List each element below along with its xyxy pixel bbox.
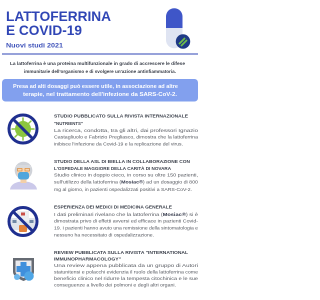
callout [2, 79, 198, 102]
icon: crossed-out virus [9, 115, 37, 143]
title: E COVID-19 [6, 22, 82, 38]
section 1 text [54, 114, 199, 146]
section 1 text: La ricerca, condotta, tra gli altri, dai professori Ignazio [54, 128, 199, 133]
section 4 text: Una review appena pubblicata da un gruppo di Autori [54, 263, 198, 268]
section 3 text [54, 204, 199, 238]
section 1 text: inibisce l'infezione da Covid-19 e la replicazione del virus. [54, 142, 183, 146]
section 4 text: conseguenze a livello dei polmoni e degli altri organi. [54, 282, 176, 288]
section 1 text: STUDIO PUBBLICATO SULLA RIVISTA INTERNAZIONALE [54, 114, 188, 118]
section 3 text: ESPERIENZA DEI MEDICI DI MEDICINA GENERALE [54, 204, 172, 210]
section 2 text: STUDIO DELLA ASL DI BIELLA IN COLLABORAZIONE CON [54, 159, 190, 164]
section 2 text: Studio clinico in doppio cieco, in corso su oltre 150 pazienti, [54, 172, 198, 178]
section 3 text: 19. I pazienti hanno avuto una remissione della sintomatologia e [54, 226, 199, 230]
icon: crossed-out hospital [9, 208, 37, 236]
section 1 text: "NUTRIENTS" [54, 121, 83, 126]
intro paragraph: immunitarie dell'organismo e di svolgere un'azione antinfiammatoria. [24, 69, 176, 74]
section 4 text: REVIEW PUBBLICATA SULLA RIVISTA "INTERNATIONAL [54, 250, 189, 255]
icon: shield with medical cross [13, 258, 34, 281]
section 3 text: nessuno ha necessitato di ospedalizzazione. [54, 232, 154, 238]
intro paragraph [10, 61, 186, 74]
section 2 text: L'OSPEDALE MAGGIORE DELLA CARITÀ DI NOVARA [54, 166, 171, 171]
icon: capsule [166, 8, 190, 49]
section 4 text: IMMUNOPHARMACOLOGY" [54, 256, 121, 262]
title [6, 8, 111, 38]
callout: terapie, nel trattamento dell'infezione da SARS-CoV-2. [23, 92, 178, 98]
intro paragraph: La lattoferrina è una proteina multifunzionale in grado di accrescere le difese [10, 61, 186, 66]
section 4 text: beneficio clinico nel ridurre la tempesta citochinica e le sue [54, 276, 199, 281]
section 1 text: Castagliuolo e Fabrizio Pregliasco, dimostra che la lattoferrina [54, 134, 199, 140]
section 2 text [54, 159, 199, 192]
section 3 text: dimostrata privo di effetti avversi ed efficace in pazienti Covid- [54, 218, 199, 224]
icon: person with mask [10, 162, 37, 190]
callout: Presa ad alti dosaggi può essere utile, in associazione ad altre [13, 84, 178, 90]
subtitle: Nuovi studi 2021 [6, 42, 63, 50]
title: LATTOFERRINA [6, 8, 111, 24]
section 4 text [54, 250, 199, 288]
section 2 text: sull'utilizzo della lattoferrina ( Mosiac® ) ad un dosaggio di 800 [54, 180, 199, 184]
section 4 text: statunitensi e polacchi evidenzia il ruolo della lattoferrina come [54, 270, 199, 274]
section 2 text: mg al giorno, in pazienti ospedalizzati positivi a SARS-CoV-2. [54, 187, 192, 192]
section 3 text: I dati preliminari rivelano che la lattoferrina ( Mosiac® ) si è [54, 212, 199, 217]
